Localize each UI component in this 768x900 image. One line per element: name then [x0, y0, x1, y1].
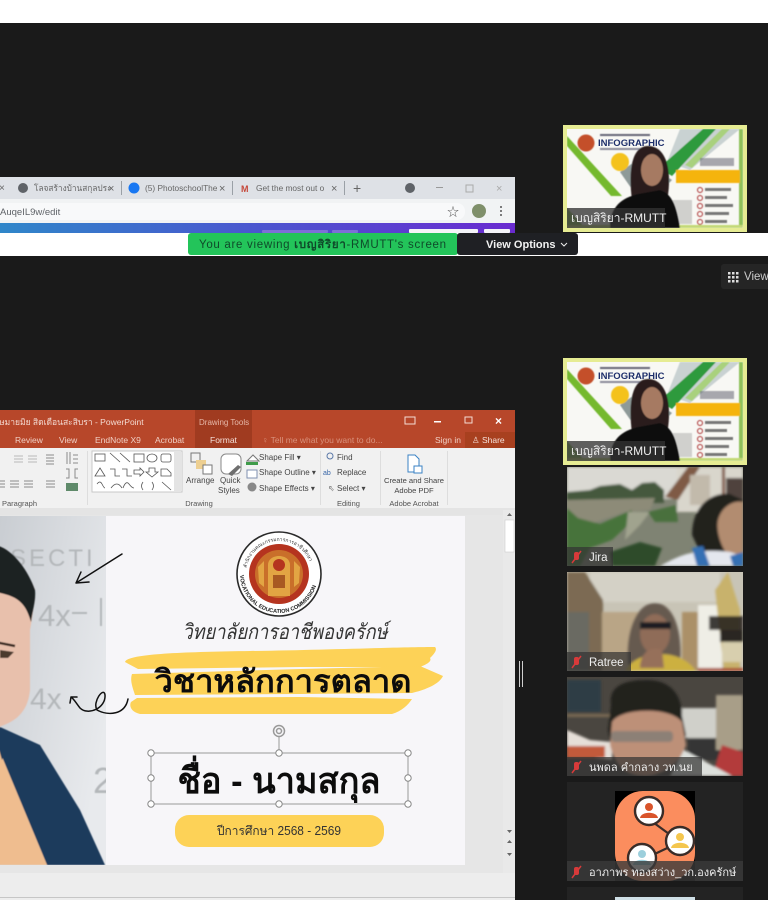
scribble doodle — [70, 692, 128, 713]
name label: เบญสิริยา-RMUTT — [571, 444, 667, 458]
participant: avatar network — [567, 782, 743, 881]
title bar — [0, 410, 515, 448]
editing group: ab — [323, 470, 331, 477]
address bar: AuqeIL9w/edit — [0, 207, 61, 218]
name label — [567, 208, 667, 228]
ribbon: Paragraph — [2, 499, 37, 508]
name label — [567, 757, 702, 776]
academic year pill — [175, 815, 384, 847]
name label: Ratree — [589, 657, 624, 669]
browser tabs: โลจสร้างบ้านสกุลประ — [34, 183, 112, 194]
browser tabs: M — [241, 184, 248, 194]
panel splitter — [519, 661, 523, 687]
adobe acrobat group: Create and Share — [384, 476, 444, 485]
browser tabs — [0, 180, 502, 196]
photo: teacher at whiteboard — [0, 516, 113, 865]
browser tabs: × — [331, 183, 337, 195]
name label: อาภาพร ทองสว่าง_วก.องครักษ์ — [589, 866, 737, 879]
name label: นพดล คำกลาง วท.นย — [589, 762, 693, 774]
whiteboard handwriting — [12, 549, 106, 794]
arrange and styles: Drawing — [185, 499, 213, 508]
arrange and styles — [185, 453, 241, 508]
name label — [567, 652, 631, 671]
ribbon tabs: ♀ Tell me what you want to do... — [262, 435, 383, 445]
title bar: Drawing Tools — [199, 418, 249, 427]
zoom banner: you are viewing: You are viewing เบญสิริยา-RMUTT's screen — [199, 238, 447, 251]
name label: เบญสิริยา-RMUTT — [571, 211, 667, 225]
profile image — [615, 791, 695, 881]
college name: วิทยาลัยการอาชีพองครักษ์ — [181, 620, 392, 644]
view button — [721, 264, 768, 289]
ribbon tabs: Acrobat — [155, 435, 185, 445]
slide — [0, 516, 465, 865]
browser tabs: × — [219, 183, 225, 195]
editing group: Select ▾ — [337, 484, 365, 493]
name label — [567, 861, 743, 881]
academic year pill: ปีการศึกษา 2568 - 2569 — [217, 824, 341, 838]
ribbon tabs: View — [59, 435, 78, 445]
whiteboard handwriting: SECTI — [10, 545, 96, 572]
shape fill outline effects — [246, 453, 316, 493]
name label — [567, 547, 613, 566]
browser tabs: × — [108, 183, 114, 195]
ribbon tabs — [15, 432, 515, 448]
participant: third — [567, 677, 743, 776]
adobe acrobat group: Adobe PDF — [394, 486, 434, 495]
browser tabs: Get the most out o — [256, 183, 325, 193]
browser tabs: (5) PhotoschoolThe — [145, 183, 218, 193]
page header strip — [0, 223, 515, 233]
logo: vocational education commission — [236, 531, 322, 617]
arrange and styles: Arrange — [186, 476, 215, 485]
editing group: ⇖ — [328, 484, 335, 493]
powerpoint window — [0, 410, 515, 900]
editing group: Editing — [337, 499, 360, 508]
zoom banner: you are viewing: View Options — [486, 239, 555, 251]
editor area — [0, 510, 515, 900]
arrange and styles: Styles — [218, 486, 240, 495]
logo: vocational education commission: สำนักงานคณะกรรมการการอาชีวศึกษา — [243, 538, 312, 568]
whiteboard handwriting: 4x — [38, 598, 71, 633]
address bar — [0, 203, 502, 220]
top speaker thumbnail — [563, 125, 747, 232]
whiteboard handwriting: 4x — [30, 683, 62, 716]
rotate handle — [274, 726, 284, 736]
ribbon tabs: Sign in — [435, 435, 461, 445]
browser window: shared screen top — [0, 177, 515, 233]
ribbon tabs: Review — [15, 435, 44, 445]
title bar: ษมายมิย สิดเดือนสะสิบรา - PowerPoint — [0, 417, 144, 427]
ribbon tabs: ♙ Share — [472, 435, 505, 445]
editing group: Replace — [337, 468, 367, 477]
shape fill outline effects: Shape Fill ▾ — [259, 453, 301, 462]
adobe acrobat group: Adobe Acrobat — [389, 499, 440, 508]
speaker thumbnail — [563, 358, 747, 465]
paragraph tools — [0, 452, 78, 487]
zoom banner: you are viewing — [188, 233, 578, 255]
shape fill outline effects: Shape Outline ▾ — [259, 468, 316, 477]
selected text box — [148, 726, 411, 807]
ribbon tabs: Format — [210, 435, 238, 445]
ribbon — [0, 448, 515, 515]
logo: vocational education commission: VOCATIONAL EDUCATION COMMISSION — [240, 574, 316, 613]
name label — [567, 441, 667, 461]
whiteboard handwriting: 2 — [93, 760, 113, 801]
ribbon tabs: EndNote X9 — [95, 435, 141, 445]
participant: cropped bottom — [567, 887, 743, 900]
view button: View — [744, 271, 768, 283]
editing group: Find — [337, 453, 353, 462]
editing group — [323, 453, 367, 508]
name label: Jira — [589, 552, 608, 564]
speaker thumbnail: INFOGRAPHIC — [598, 371, 665, 382]
shape gallery — [92, 451, 182, 492]
arrow doodle — [76, 554, 122, 583]
title bar: × — [495, 414, 502, 428]
course title: วิชาหลักการตลาด — [154, 664, 412, 699]
browser tabs: + — [353, 180, 361, 196]
top speaker thumbnail: INFOGRAPHIC — [598, 138, 665, 149]
selected text box: ชื่อ - นามสกุล — [178, 755, 380, 804]
adobe acrobat group — [384, 455, 444, 508]
yellow brush strokes — [125, 647, 443, 714]
shape fill outline effects: Shape Effects ▾ — [259, 484, 315, 493]
arrange and styles: Quick — [220, 476, 241, 485]
participant: Jira — [567, 467, 743, 566]
address bar: ☆ — [447, 205, 459, 219]
browser tabs: × — [496, 183, 502, 195]
participant: Ratree — [567, 572, 743, 671]
